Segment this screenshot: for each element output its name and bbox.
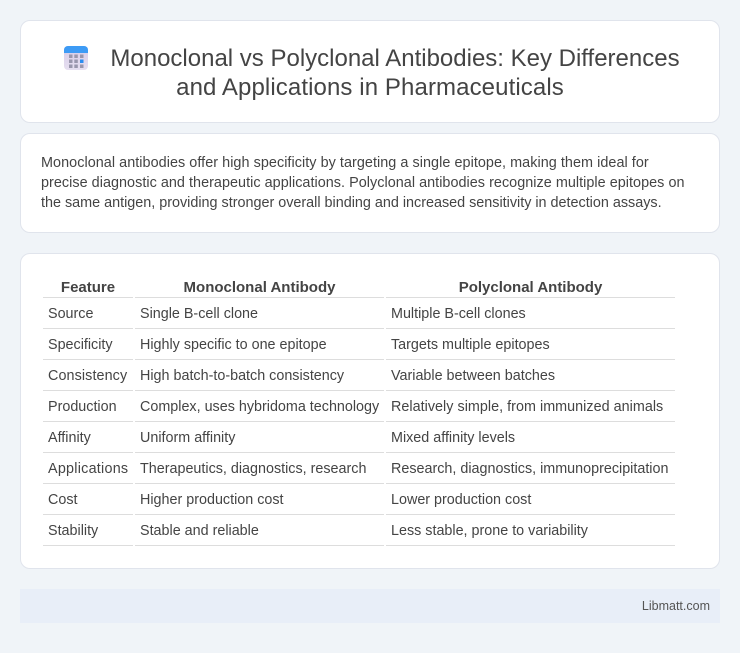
text: Stability	[48, 523, 98, 539]
summary text	[41, 155, 685, 211]
row: consistency	[43, 368, 675, 391]
text: Stable and reliable	[140, 523, 259, 539]
row: affinity	[43, 430, 675, 453]
text: Complex, uses hybridoma technology	[140, 399, 379, 415]
panel: title header	[20, 20, 720, 123]
text: Consistency	[48, 368, 127, 384]
text: Higher production cost	[140, 492, 284, 508]
icon: calendar	[64, 46, 88, 70]
text: Lower production cost	[391, 492, 531, 508]
text: Uniform affinity	[140, 430, 235, 446]
table header: polyclonal antibody: Polyclonal Antibody	[459, 279, 602, 296]
table header: monoclonal antibody	[135, 278, 384, 298]
text: Production	[48, 399, 117, 415]
text: Relatively simple, from immunized animals	[391, 399, 663, 415]
text: Targets multiple epitopes	[391, 337, 550, 353]
table header: polyclonal antibody	[386, 278, 675, 298]
text: Less stable, prone to variability	[391, 523, 588, 539]
text: Cost	[48, 492, 78, 508]
text: Single B-cell clone	[140, 306, 258, 322]
title: and Applications in Pharmaceuticals	[176, 74, 564, 101]
row: source	[43, 306, 675, 329]
row: specificity	[43, 337, 675, 360]
text: Therapeutics, diagnostics, research	[140, 461, 366, 477]
summary text: Monoclonal antibodies offer high specificity by targeting a single epitope, making them ideal for	[41, 155, 649, 171]
text: Mixed affinity levels	[391, 430, 515, 446]
text: Affinity	[48, 430, 91, 446]
text: Variable between batches	[391, 368, 555, 384]
table header: feature	[43, 278, 133, 298]
summary text: precise diagnostic and therapeutic applications. Polyclonal antibodies recognize multiple epitopes on	[41, 175, 685, 191]
table header: feature: Feature	[61, 279, 115, 296]
text: Research, diagnostics, immunoprecipitation	[391, 461, 668, 477]
text: Source	[48, 306, 93, 322]
text: Highly specific to one epitope	[140, 337, 327, 353]
summary text: the same antigen, providing stronger overall binding and increased sensitivity in detection assays.	[41, 195, 662, 211]
row: applications	[43, 461, 675, 484]
row: production	[43, 399, 675, 422]
footer text: Libmatt.com	[642, 599, 710, 613]
footer bar	[20, 589, 720, 623]
title: Monoclonal vs Polyclonal Antibodies: Key Differences	[110, 45, 680, 72]
text: Specificity	[48, 337, 113, 353]
panel: summary	[20, 133, 720, 233]
panel: comparison table	[20, 253, 720, 569]
text: High batch-to-batch consistency	[140, 368, 344, 384]
text: Multiple B-cell clones	[391, 306, 526, 322]
row: stability	[43, 523, 675, 546]
title	[110, 45, 680, 101]
row: cost	[43, 492, 675, 515]
text: Applications	[48, 461, 128, 477]
table header: monoclonal antibody: Monoclonal Antibody	[184, 279, 335, 296]
